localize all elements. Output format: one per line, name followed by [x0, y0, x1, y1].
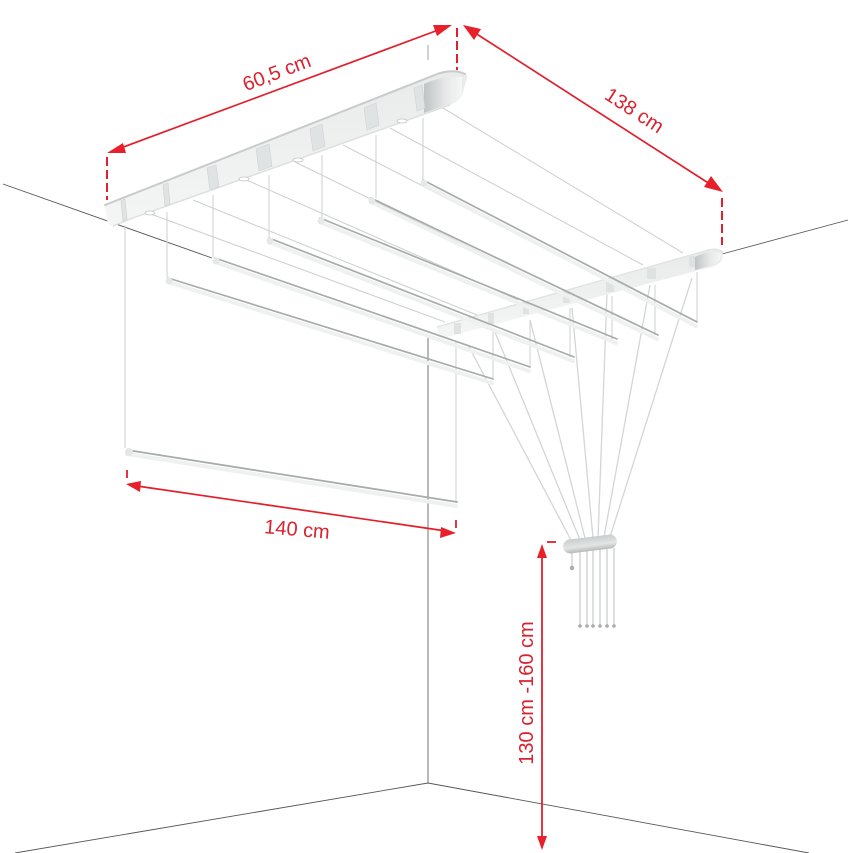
bar 6: [166, 278, 493, 383]
dimension: height 130-160 cm: [516, 542, 556, 850]
rail clips: [121, 85, 425, 221]
right rail clips: [454, 256, 695, 334]
rail notches: [145, 119, 407, 215]
label 140 cm: 140 cm: [263, 516, 331, 544]
right ceiling rail: [437, 249, 723, 338]
vertical hanger wires: [125, 118, 697, 502]
bar 2: [368, 198, 658, 339]
bar 4: [266, 238, 574, 361]
rail end cap: [424, 77, 462, 113]
dimension: width 60,5 cm: [107, 25, 457, 200]
rail lower edge: [113, 105, 450, 226]
bar 3: [318, 218, 617, 343]
cords between rails: [148, 108, 683, 322]
bar 7 lowered: [125, 448, 457, 506]
label 138 cm: 138 cm: [601, 84, 667, 138]
bar 1: [420, 180, 697, 326]
cord handle: [562, 534, 618, 554]
right rail end cap: [695, 252, 721, 270]
dimension: bar length 140 cm: [126, 470, 456, 544]
label 60,5 cm: 60,5 cm: [240, 50, 314, 96]
drying bars: [125, 180, 697, 506]
dimension: depth 138 cm: [463, 25, 723, 245]
label 130 cm -160 cm: 130 cm -160 cm: [516, 621, 538, 765]
left ceiling rail: [105, 70, 467, 226]
bar 5: [212, 258, 530, 371]
fan of cords to handle: [468, 278, 692, 542]
pull cords with beads: [570, 548, 616, 628]
